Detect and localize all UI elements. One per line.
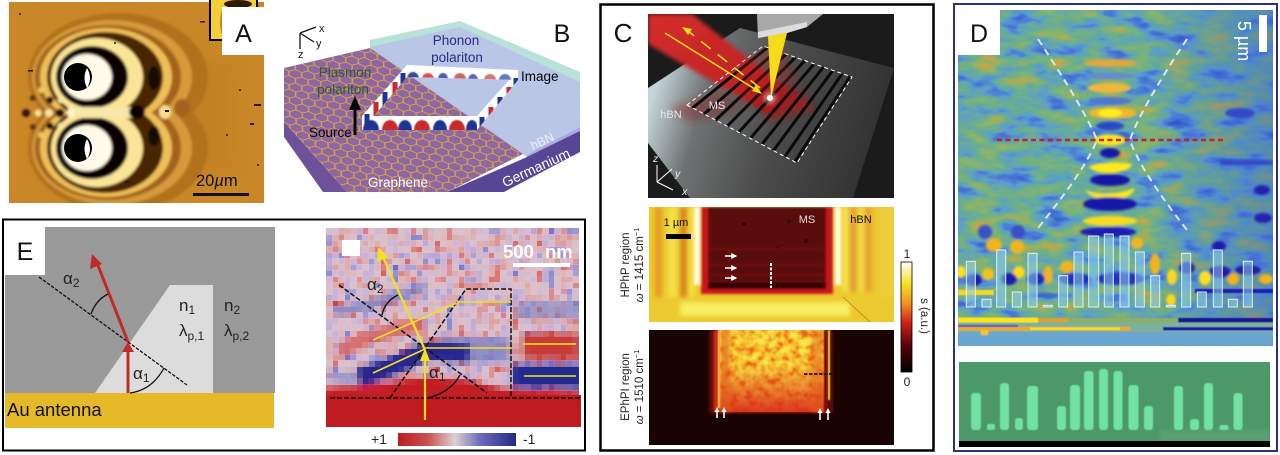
label box A <box>222 7 265 55</box>
axes: y <box>674 168 681 180</box>
scale bar 500 nm: 500 <box>503 241 534 262</box>
schematic: metasurface under tip: hBN <box>660 109 682 121</box>
axes for panel B: y <box>316 38 322 50</box>
yellow beams <box>373 247 576 420</box>
schematic: refraction at lens edge: p,1 <box>188 329 205 343</box>
lower strips <box>958 318 1273 346</box>
colour bar: s (a.u.) <box>918 298 930 334</box>
map: EPhPl region <box>649 330 894 445</box>
labels for panel B: polariton <box>431 50 483 65</box>
panel D frame <box>954 4 1277 451</box>
schematic: refraction at lens edge: 2 <box>73 276 80 290</box>
colour bar: 1 <box>904 247 911 261</box>
labels for panel B: Graphene <box>368 175 428 190</box>
schematic: refraction at lens edge: α <box>133 364 143 383</box>
red dashed profile line <box>997 139 1224 141</box>
stripes <box>692 48 850 162</box>
hole bottom <box>64 134 92 162</box>
tip holder <box>757 14 823 38</box>
axis labels for the two maps: EPhPI region <box>620 353 632 421</box>
labels for panel B: Image <box>521 69 559 84</box>
germanium layer <box>447 131 580 192</box>
tip light cone <box>768 33 787 98</box>
source arrow <box>349 96 361 135</box>
normal line <box>39 277 187 385</box>
axes: z <box>652 153 659 165</box>
schematic: refraction at lens edge: λ <box>179 321 188 340</box>
schematic: refraction at lens edge: α <box>63 269 73 288</box>
scale bar 500 nm <box>503 241 573 267</box>
axes for panel B: z <box>298 49 304 61</box>
labels for panel B <box>309 20 572 190</box>
scale bar 20 µm <box>193 172 249 196</box>
schematic: metasurface under tip: MS <box>709 100 725 112</box>
labels for panel B: Source <box>309 125 352 140</box>
map: HPhP region: MS <box>799 214 815 226</box>
measured map with overlay: 2 <box>377 282 384 296</box>
axis labels for the two maps: −1 <box>632 350 641 358</box>
label box A: A <box>235 20 252 48</box>
graphene layer <box>284 48 523 192</box>
panel E frame <box>3 220 585 450</box>
label D <box>958 10 1000 55</box>
axis labels for the two maps: HPhP region <box>620 232 632 298</box>
map: HPhP region <box>649 207 894 322</box>
measured map with overlay: α <box>367 275 377 294</box>
measured map with overlay <box>326 228 581 427</box>
colour scale +1 to -1 <box>371 431 536 447</box>
scale bar 500 nm: nm <box>545 241 573 262</box>
labels for panel B: Plasmon <box>319 65 371 80</box>
microscope image of fabricated bars <box>959 362 1270 447</box>
panel A: interference near-field image <box>9 0 265 212</box>
colour bar: 0 <box>904 375 911 389</box>
colour bar <box>901 247 930 389</box>
schematic: refraction at lens edge: p,2 <box>232 329 250 343</box>
dashed lens outline <box>330 285 581 398</box>
schematic: refraction at lens edge: λ <box>224 321 232 340</box>
scale bar 5 µm <box>1234 15 1267 61</box>
yellow and blue lower field <box>956 108 1273 306</box>
angle arcs <box>382 295 460 398</box>
panel B: graphene and hBN heterostructure lens <box>284 20 580 192</box>
schematic: refraction at lens edge: n <box>179 296 188 315</box>
labels for panel B: polariton <box>317 82 369 97</box>
near-field map with lens fringes <box>956 10 1273 346</box>
dashed focusing lines <box>1038 39 1187 230</box>
schematic: refraction at lens edge: n <box>224 296 233 315</box>
labels for panel B: B <box>554 20 570 48</box>
hBN layer <box>370 21 580 160</box>
colour scale +1 to -1: -1 <box>523 431 536 447</box>
schematic: refraction at lens edge: 1 <box>188 303 195 317</box>
incident and scattered beams <box>665 27 762 94</box>
axis labels for the two maps: −1 <box>632 228 641 236</box>
metasurface bars overlay <box>966 234 1252 307</box>
map: HPhP region: 1 µm <box>664 217 688 229</box>
hole top <box>64 63 92 91</box>
axis labels for the two maps: ω = 1510 cm <box>634 358 646 424</box>
refraction arrows <box>90 254 134 393</box>
scale bar 5 µm: 5 µm <box>1234 21 1254 61</box>
labels for panel B: hBN <box>528 130 556 153</box>
labels for panel B: Phonon <box>433 33 479 48</box>
fringes <box>1080 59 1137 237</box>
inset thumbnail <box>210 0 257 40</box>
axes <box>652 156 688 195</box>
measured map with overlay: 1 <box>439 370 446 384</box>
angle arcs <box>91 294 164 393</box>
schematic: refraction at lens edge: Au antenna <box>7 399 102 420</box>
graphene side <box>284 122 347 192</box>
axes for panel B: x <box>319 23 325 35</box>
white square <box>342 240 360 256</box>
lens walls with standing waves <box>362 65 518 130</box>
schematic: refraction at lens edge: 1 <box>143 371 150 385</box>
schematic: refraction at lens edge: 2 <box>233 303 240 317</box>
axes: x <box>681 186 688 198</box>
map: HPhP region: hBN <box>850 214 872 226</box>
schematic: refraction at lens edge <box>5 227 275 428</box>
label D: D <box>970 20 988 48</box>
schematic: metasurface under tip <box>648 14 894 198</box>
scale bar 20 µm: 20µm <box>196 172 238 190</box>
labels for panel B: Germanium <box>499 145 572 190</box>
axis labels for the two maps <box>620 228 646 424</box>
measured map with overlay: α <box>429 363 439 382</box>
panel C frame <box>600 4 934 450</box>
axes for panel B <box>298 23 325 61</box>
axis labels for the two maps: ω = 1415 cm <box>634 236 646 302</box>
label C: C <box>614 18 632 48</box>
colour scale +1 to -1: +1 <box>371 431 387 447</box>
label E: E <box>17 238 33 266</box>
